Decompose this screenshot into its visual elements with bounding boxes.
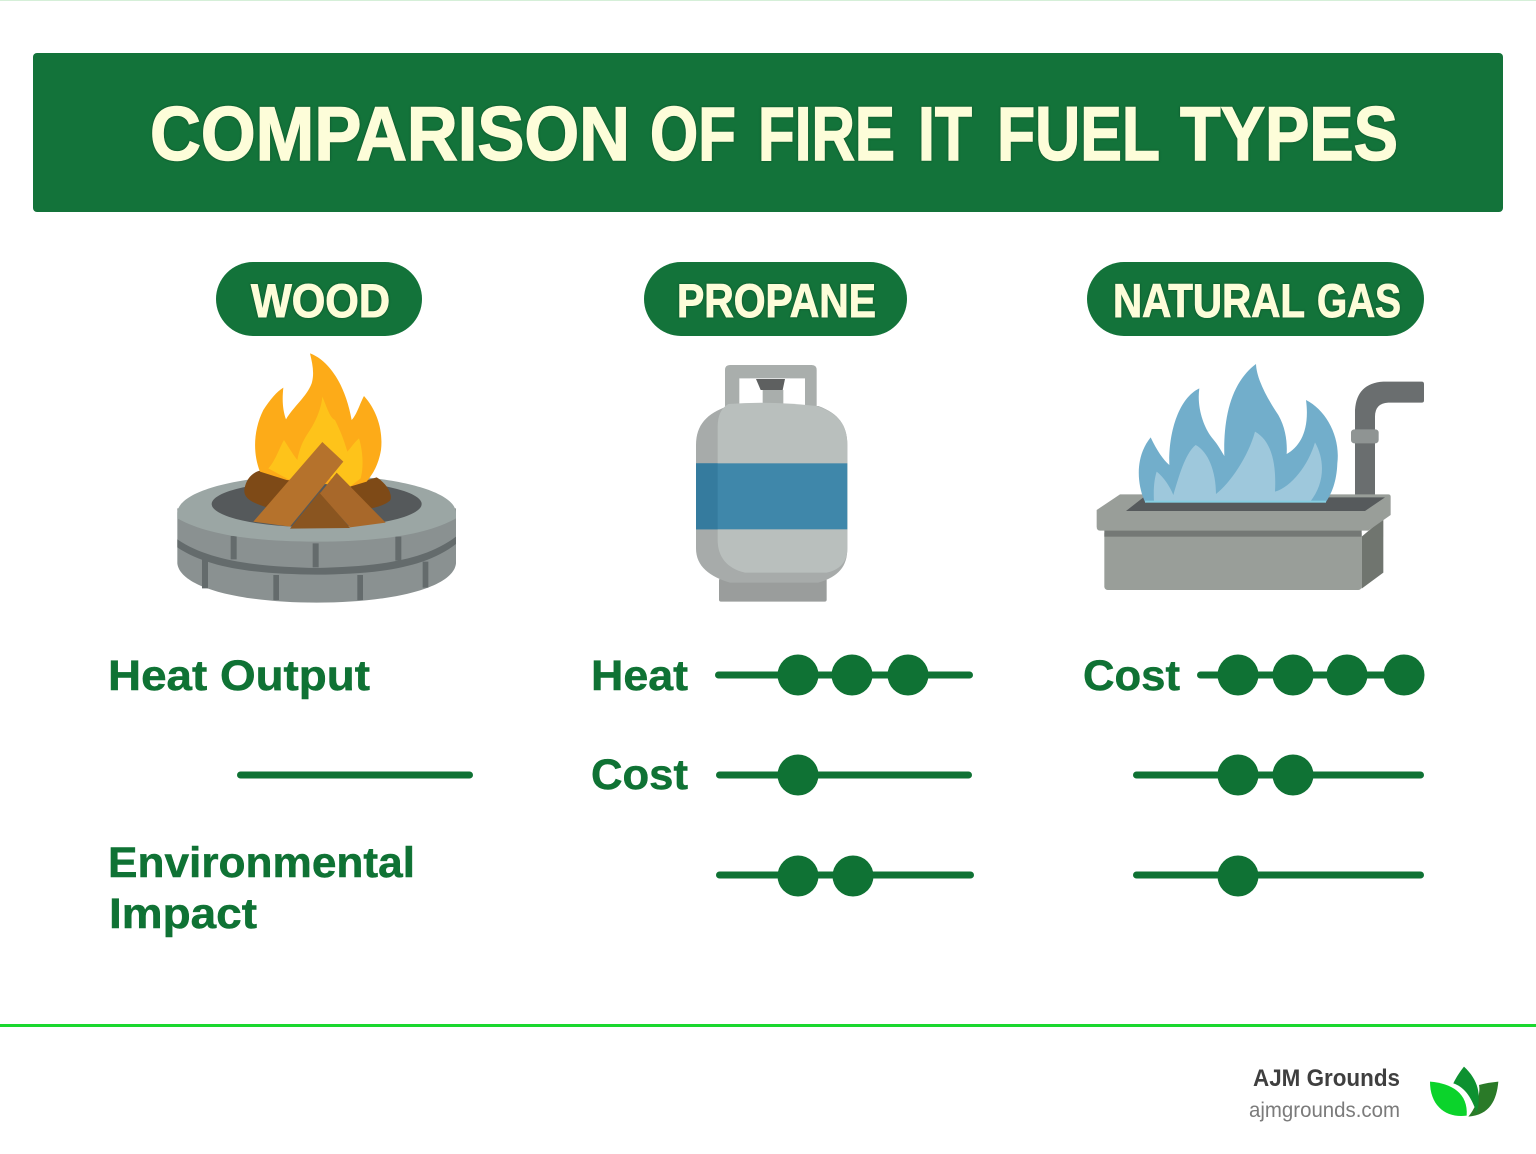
wood heading pill: WOOD	[251, 274, 390, 327]
rating: propane cost	[716, 754, 972, 796]
rating: propane heat	[715, 654, 973, 696]
row label: environmental impact: Impact	[109, 890, 257, 938]
propane heading pill	[644, 262, 907, 336]
title: TYPES	[1180, 92, 1398, 177]
panel: natural gas	[1087, 262, 1424, 590]
rating: gas environmental	[1133, 856, 1424, 896]
icon: propane tank	[696, 365, 847, 602]
title: FIRE	[758, 92, 895, 177]
icon: leaf logo	[1430, 1067, 1498, 1117]
rating: gas heat	[1133, 754, 1424, 796]
title banner	[33, 53, 1503, 212]
rating: gas cost	[1197, 654, 1424, 696]
brand url: ajmgrounds.com	[1249, 1099, 1400, 1122]
row label: environmental impact	[108, 839, 415, 938]
rating: propane environmental	[716, 856, 974, 896]
label: propane cost: Cost	[591, 751, 688, 799]
panel: propane	[644, 262, 907, 602]
natural gas heading pill: NATURAL	[1113, 274, 1305, 327]
rating: wood cost	[237, 772, 473, 778]
wood heading pill	[216, 262, 422, 336]
title: COMPARISON	[150, 92, 630, 177]
title	[150, 92, 1398, 177]
row label: heat output: Heat Output	[108, 652, 370, 700]
title: IT	[918, 92, 972, 177]
icon: fire pit	[177, 353, 456, 603]
icon: gas burner	[1097, 364, 1424, 590]
panel: wood	[177, 262, 456, 603]
propane heading pill: PROPANE	[677, 274, 876, 327]
label: gas cost: Cost	[1083, 652, 1180, 700]
title: OF	[650, 92, 736, 177]
row label: environmental impact: Environmental	[108, 839, 415, 887]
natural gas heading pill	[1087, 262, 1424, 336]
title: FUEL	[997, 92, 1160, 177]
label: propane heat: Heat	[591, 652, 688, 700]
footer brand	[1249, 1065, 1498, 1122]
brand name: AJM Grounds	[1253, 1065, 1400, 1092]
natural gas heading pill: GAS	[1317, 274, 1401, 327]
